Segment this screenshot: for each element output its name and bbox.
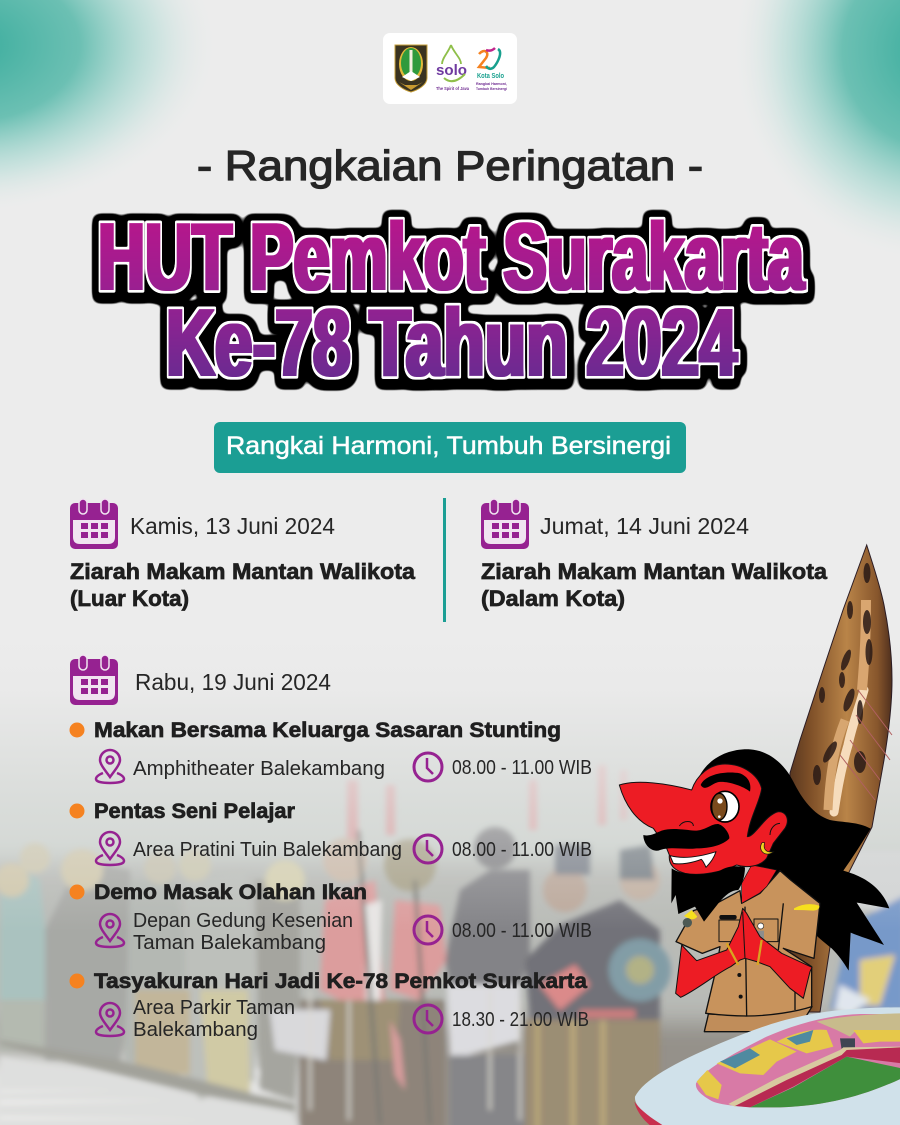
panel: Jumat 14 Juni: (Dalam Kota) [481, 586, 625, 611]
panel: Rabu 19 Juni: Rabu, 19 Juni 2024 [135, 669, 331, 695]
event: Tasyakuran: Balekambang [133, 1019, 258, 1041]
ear inner [770, 823, 780, 835]
event: Tasyakuran: 18.30 - 21.00 WIB [452, 1009, 589, 1031]
logo: Kota Solo anniversary: Kota Solo [477, 73, 504, 80]
logo card [383, 33, 517, 104]
face and nose [619, 764, 787, 874]
icon: calendar [70, 655, 118, 705]
flags [347, 780, 358, 850]
left crowd [0, 865, 48, 1000]
eye [711, 791, 739, 822]
neck [742, 865, 777, 903]
beard [671, 866, 745, 922]
icon: location pin [96, 832, 124, 865]
panel: Jumat 14 Juni [481, 499, 828, 611]
event: Demo Masak: 08.00 - 11.00 WIB [452, 920, 592, 942]
logo: Kota Solo anniversary: Rangkai Harmoni, [476, 81, 507, 86]
concourse [728, 1047, 900, 1107]
icon: clock [414, 916, 442, 944]
logo: Kota Solo anniversary [476, 48, 507, 91]
moustache [643, 824, 729, 851]
panel: Rabu 19 Juni [70, 655, 331, 705]
event: Makan Bersama [70, 719, 592, 783]
icon: location pin [96, 914, 124, 947]
right guards [525, 900, 660, 1020]
icon: calendar [70, 499, 118, 549]
icon: clock [414, 1005, 442, 1033]
running track [735, 1047, 900, 1107]
centre guards [320, 880, 385, 1000]
event: Demo Masak: Taman Balekambang [133, 932, 326, 954]
event: Tasyakuran: Area Parkir Taman [133, 997, 295, 1019]
hair [698, 749, 889, 971]
illustration: red wayang mascot [619, 749, 889, 1032]
heading: Rangkaian Peringatan: - Rangkaian Peringatan - [197, 142, 703, 189]
illustration: keris [790, 545, 892, 1012]
icon: calendar [481, 499, 529, 549]
icon: location pin [96, 1003, 124, 1036]
pitch [750, 1057, 900, 1107]
event: Pentas Seni: Pentas Seni Pelajar [94, 800, 295, 823]
logo: Kota Solo anniversary: Tumbuh Bersinergi [476, 86, 507, 91]
arms and praying hands [676, 908, 812, 998]
eyebrow [701, 773, 750, 792]
illustration: Manahan stadium [634, 1007, 900, 1125]
logo: Surakarta coat of arms [395, 45, 427, 92]
event: Demo Masak [70, 881, 592, 954]
panel: Kamis 13 Juni [70, 499, 416, 611]
right side figures [840, 850, 900, 910]
background photo: crowd at ceremony [0, 630, 900, 1125]
logo: Solo The Spirit of Java: The Spirit of Java [436, 86, 469, 91]
theme banner [214, 422, 686, 473]
shirt [676, 871, 820, 1016]
stands [696, 1014, 900, 1108]
panel: Kamis 13 Juni: Ziarah Makam Mantan Walikota [70, 559, 416, 584]
event: Makan Bersama: 08.00 - 11.00 WIB [452, 757, 592, 779]
logo: Solo The Spirit of Java: solo [436, 62, 467, 79]
nostril [679, 821, 693, 826]
event: Pentas Seni [70, 800, 592, 865]
icon: location pin [96, 750, 124, 783]
black jacket [445, 870, 530, 985]
event: Tasyakuran [70, 970, 589, 1041]
icon: clock [414, 753, 442, 781]
event: Tasyakuran: Tasyakuran Hari Jadi Ke-78 Pemkot Surakarta [94, 970, 587, 993]
icon: clock [414, 835, 442, 863]
panel: Jumat 14 Juni: Ziarah Makam Mantan Walikota [481, 559, 828, 584]
earring [761, 843, 774, 854]
road [0, 1056, 300, 1125]
event: Makan Bersama: Amphitheater Balekambang [133, 758, 385, 780]
panel: Kamis 13 Juni: Kamis, 13 Juni 2024 [130, 513, 335, 539]
swords [310, 990, 520, 1120]
panel: Jumat 14 Juni: Jumat, 14 Juni 2024 [540, 513, 749, 539]
logo: Solo The Spirit of Java [436, 45, 469, 91]
title: HUT Pemkot Surakarta Ke-78 Tahun 2024 [98, 204, 804, 396]
event: Pentas Seni: 08.00 - 11.00 WIB [452, 839, 592, 861]
teeth and fang [670, 852, 716, 867]
event: Pentas Seni: Area Pratini Tuin Balekambang [133, 839, 402, 861]
event: Demo Masak: Depan Gedung Kesenian [133, 910, 353, 932]
event: Demo Masak: Demo Masak Olahan Ikan [94, 881, 367, 904]
trousers [704, 1007, 812, 1032]
theme banner: Rangkai Harmoni, Tumbuh Bersinergi [226, 432, 671, 460]
event: Makan Bersama: Makan Bersama Keluarga Sasaran Stunting [94, 719, 561, 742]
panel: Kamis 13 Juni: (Luar Kota) [70, 586, 189, 611]
